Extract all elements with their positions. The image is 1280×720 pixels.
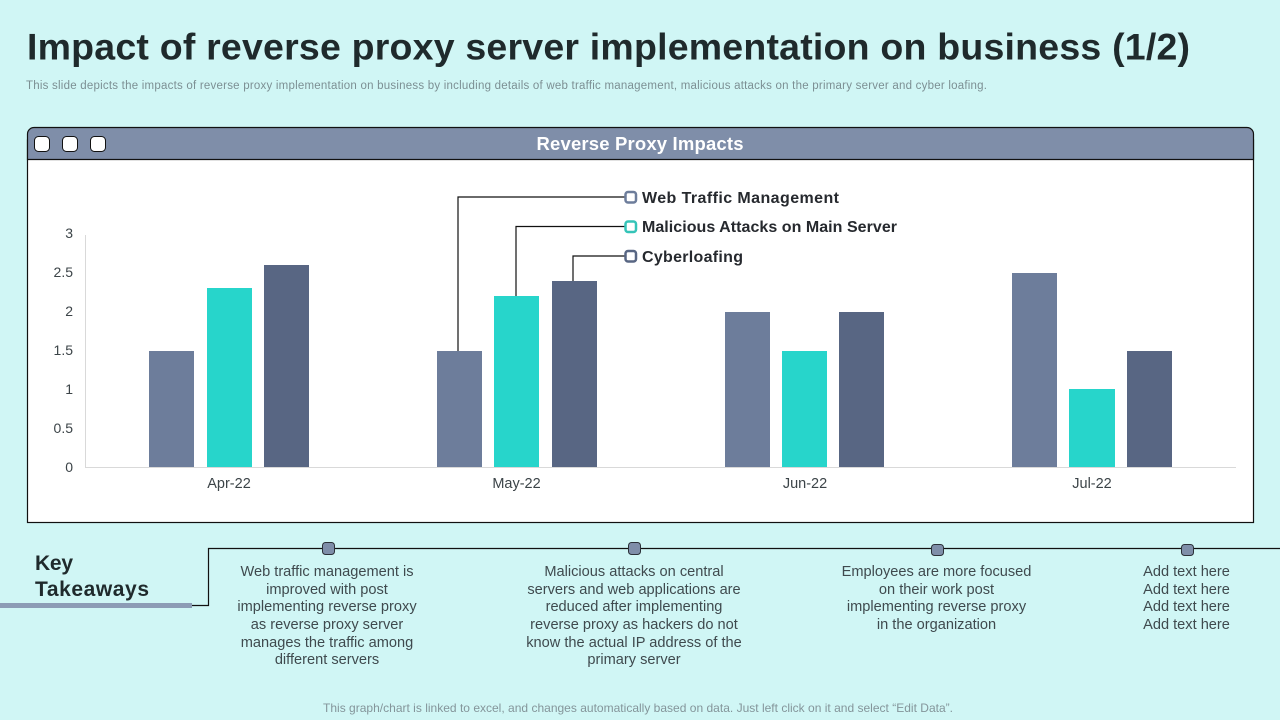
takeaway 1: improved with post: [266, 582, 388, 598]
legend: malicious attacks: Malicious Attacks on Main Server: [642, 219, 897, 236]
y axis labels: 0.5: [54, 420, 73, 436]
axes: [86, 235, 1236, 468]
takeaway 1: manages the traffic among: [241, 635, 413, 651]
y axis labels: 2: [65, 303, 73, 319]
legend: cyberloafing: Cyberloafing: [642, 249, 743, 266]
group: Apr-22: [149, 265, 309, 467]
key takeaways heading: [35, 552, 149, 601]
takeaway 4: Add text here: [1143, 617, 1230, 633]
timeline connector: [192, 548, 1280, 606]
takeaway 3: in the organization: [877, 617, 996, 633]
timeline markers: [322, 542, 1194, 556]
takeaway 1: different servers: [275, 652, 379, 668]
subtitle: This slide depicts the impacts of reverse proxy implementation on business by including details of web traffic management, malicious attacks on the primary server and cyber loafing.: [26, 80, 987, 92]
takeaway 4: Add text here: [1143, 582, 1230, 598]
takeaway 3: [842, 564, 1031, 633]
heading underline: [0, 603, 192, 608]
legend: web traffic management: Web Traffic Management: [642, 190, 840, 207]
takeaway 2: servers and web applications are: [527, 582, 741, 598]
takeaway 4: Add text here: [1143, 599, 1230, 615]
takeaway 4: [1143, 564, 1230, 633]
key takeaways heading: Key: [35, 552, 73, 575]
y axis labels: 2.5: [54, 264, 73, 280]
leader lines: [458, 197, 625, 351]
y axis labels: 1.5: [54, 342, 73, 358]
y axis labels: 3: [65, 225, 73, 241]
x axis labels: Jun-22: [783, 476, 827, 492]
takeaway 3: implementing reverse proxy: [847, 599, 1027, 615]
x axis labels: Jul-22: [1072, 476, 1112, 492]
panel heading: Reverse Proxy Impacts: [536, 133, 744, 154]
panel header bar: [27, 128, 1253, 160]
group: Jul-22: [1012, 273, 1172, 467]
footer note: This graph/chart is linked to excel, and changes automatically based on data. Just left click on it and select “Edit Data”.: [323, 701, 953, 715]
takeaway 4: Add text here: [1143, 564, 1230, 580]
takeaway 2: primary server: [587, 652, 681, 668]
panel: reverse proxy impacts: [27, 128, 1253, 522]
y axis labels: 0: [65, 459, 73, 475]
y axis labels: [54, 225, 73, 475]
group: May-22: [437, 281, 597, 467]
takeaway 2: know the actual IP address of the: [526, 635, 742, 651]
takeaway 1: as reverse proxy server: [251, 617, 403, 633]
takeaway 2: reverse proxy as hackers do not: [530, 617, 738, 633]
y axis labels: 1: [65, 381, 73, 397]
panel body: [28, 140, 1254, 522]
takeaway 1: implementing reverse proxy: [237, 599, 417, 615]
takeaway 2: Malicious attacks on central: [544, 564, 724, 580]
x axis labels: Apr-22: [207, 476, 251, 492]
takeaway 1: [237, 564, 417, 668]
takeaway 1: Web traffic management is: [240, 564, 414, 580]
takeaway 3: on their work post: [879, 582, 994, 598]
takeaway 3: Employees are more focused: [842, 564, 1031, 580]
takeaway 2: [526, 564, 742, 668]
legend callouts: [458, 190, 897, 351]
takeaway 2: reduced after implementing: [546, 599, 722, 615]
title: Impact of reverse proxy server implementation on business (1/2): [27, 26, 1190, 68]
key takeaways heading: Takeaways: [35, 578, 149, 601]
x axis labels: May-22: [492, 476, 541, 492]
bar chart: [54, 225, 1236, 492]
window buttons: [34, 136, 106, 152]
x axis labels: [207, 476, 1112, 492]
group: Jun-22: [725, 312, 884, 467]
